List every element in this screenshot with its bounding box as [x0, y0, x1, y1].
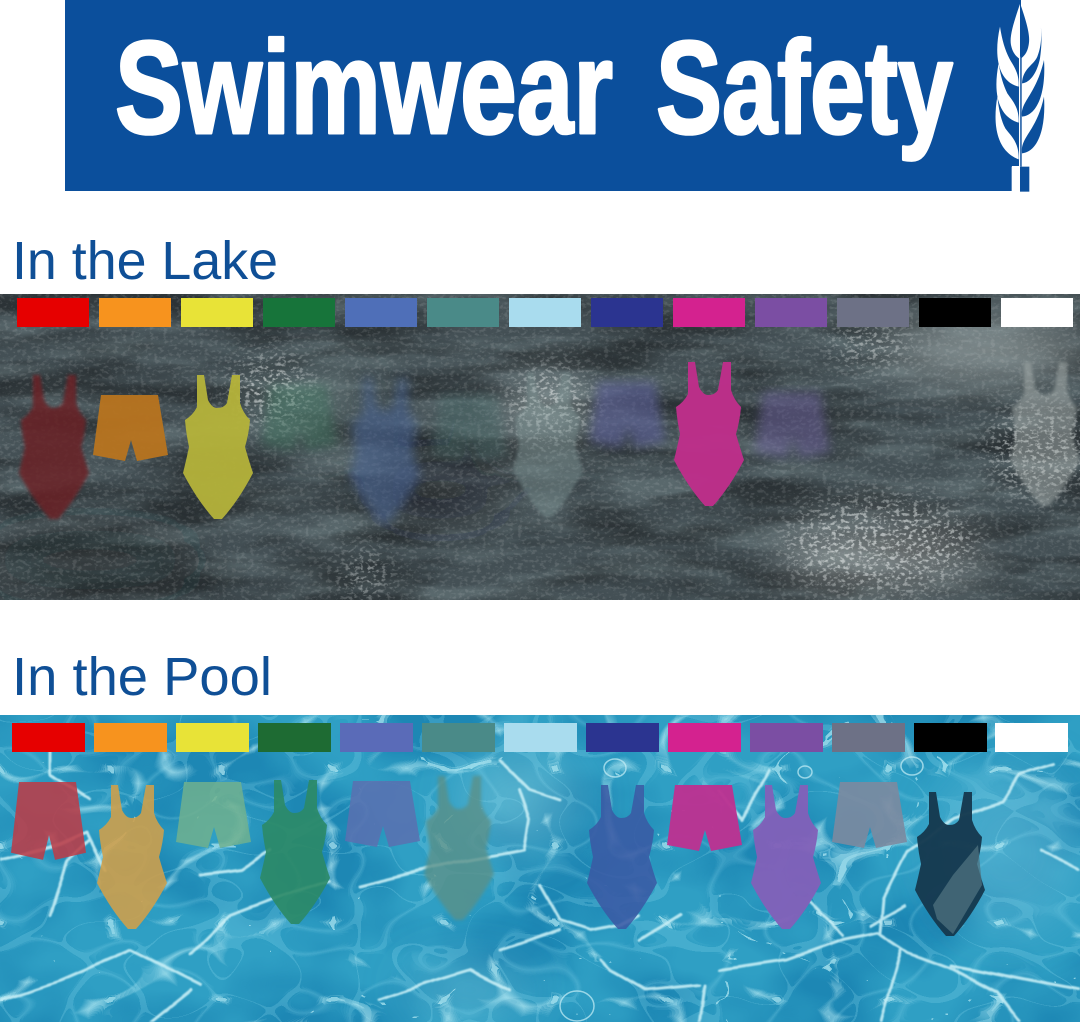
icon: wheat logo [996, 4, 1044, 192]
title banner [65, 0, 1021, 191]
panel: lake [0, 294, 1080, 600]
title: Swimwear [115, 14, 613, 161]
reflection on black suit [933, 845, 982, 934]
pool swimwear [11, 776, 985, 936]
lake swimwear [19, 362, 1080, 522]
lake water texture [0, 294, 1080, 600]
pool ripple rings [560, 757, 923, 1021]
pool caustic highlights [0, 730, 1080, 1022]
lake colour swatches [17, 298, 1073, 327]
panel: pool [0, 715, 1080, 1022]
title: Safety [656, 14, 953, 161]
pool water texture [0, 715, 1080, 1022]
heading: In the Pool: In the Pool [12, 647, 272, 707]
pool colour swatches [12, 723, 1068, 752]
heading: In the Lake: In the Lake [12, 231, 278, 291]
